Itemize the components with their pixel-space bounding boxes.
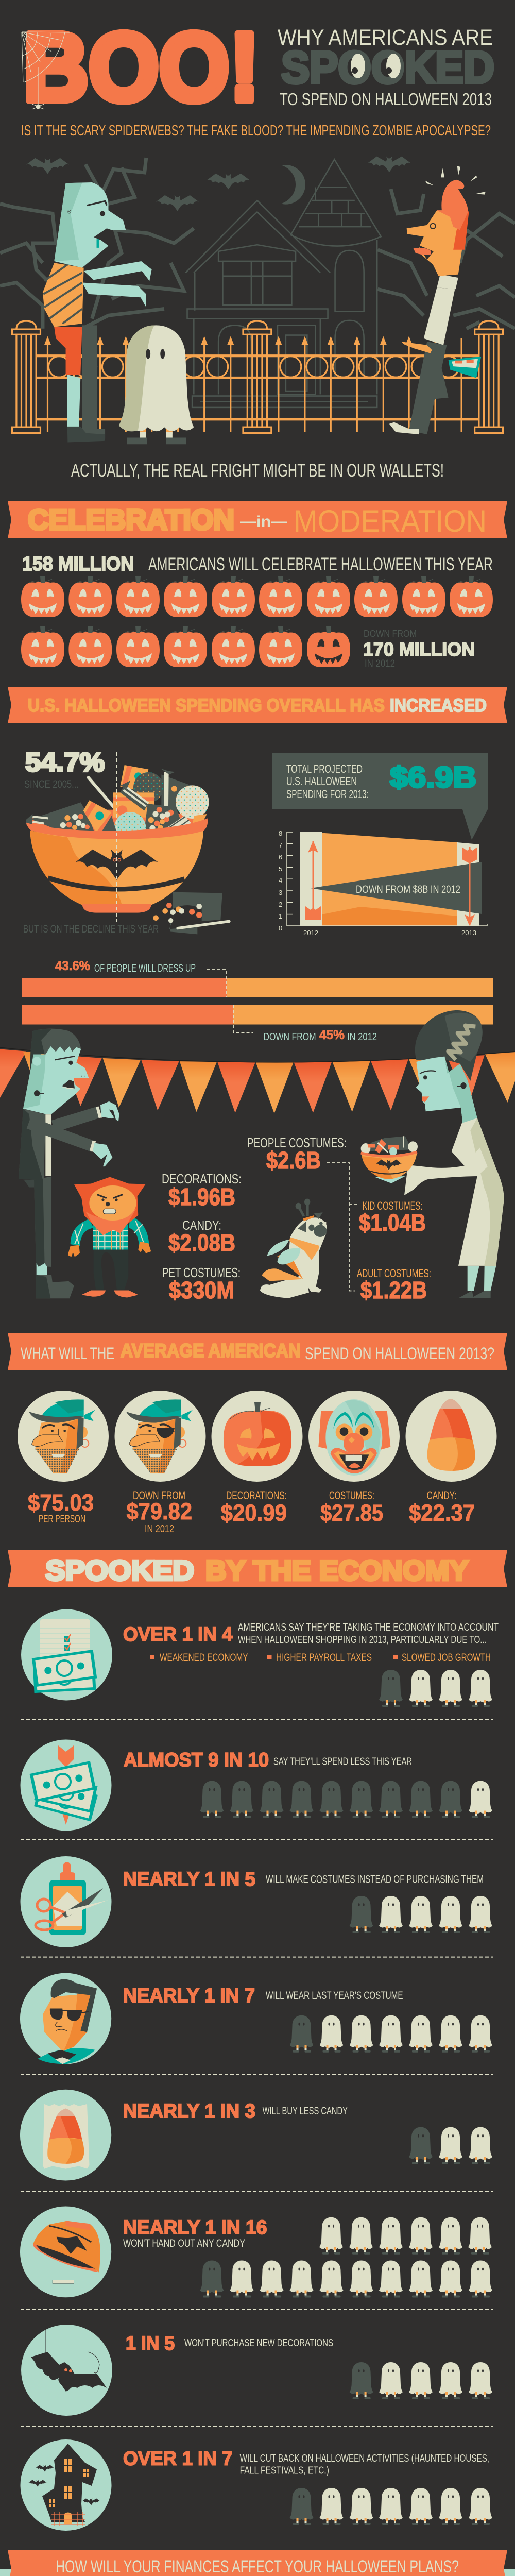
icon: candy corn bbox=[406, 1391, 496, 1482]
icon: greaser with sunglasses bbox=[20, 1973, 111, 2064]
candy bowl bbox=[26, 765, 209, 913]
ghost row bbox=[289, 2488, 492, 2525]
stat: 54.7 percent bbox=[24, 748, 105, 790]
heading: ALMOST 9 IN 10 bbox=[124, 1750, 269, 1771]
label: kid costumes: $1.04B bbox=[359, 1209, 426, 1236]
stat: down from 45 percent: IN 2012 bbox=[347, 1031, 377, 1043]
description: WILL BUY LESS CANDY bbox=[263, 2105, 348, 2117]
price: decorations: DECORATIONS: bbox=[226, 1489, 287, 1502]
haunted house outline bbox=[185, 159, 381, 408]
icon: pumpkin bbox=[211, 1391, 303, 1482]
footer mint background bbox=[0, 2569, 515, 2576]
price: decorations bbox=[221, 1489, 287, 1526]
icon: hanging bat bbox=[21, 2325, 112, 2416]
price: candy: $22.37 bbox=[409, 1500, 475, 1526]
chart labels: 1 bbox=[279, 912, 282, 920]
description: WON'T PURCHASE NEW DECORATIONS bbox=[184, 2337, 333, 2349]
fence bbox=[12, 321, 503, 433]
price: costumes bbox=[320, 1489, 383, 1526]
arrow: up 2012 bbox=[305, 841, 321, 920]
title: BOO!: BOO! bbox=[23, 13, 260, 121]
pumpkin row one bbox=[21, 576, 493, 617]
stat: down from 170 million: DOWN FROM bbox=[364, 629, 417, 639]
reasons list bbox=[150, 1652, 491, 1664]
banner: overall spending bbox=[8, 687, 507, 723]
divider bbox=[21, 2074, 493, 2075]
callout: total projected spending: U.S. HALLOWEEN bbox=[286, 775, 357, 788]
banner: average american: AVERAGE AMERICAN bbox=[121, 1340, 301, 1361]
item: nearly 1 in 7 bbox=[20, 1973, 492, 2064]
chart labels: 6 bbox=[279, 853, 282, 861]
price: 2012: IN 2012 bbox=[145, 1523, 174, 1535]
divider bbox=[21, 2191, 493, 2192]
chart labels: 0 bbox=[279, 924, 282, 932]
description bbox=[238, 1622, 499, 1646]
zombie: є bbox=[67, 207, 71, 215]
label: decorations bbox=[162, 1171, 242, 1210]
label: kid costumes bbox=[359, 1199, 426, 1236]
divider bbox=[21, 2309, 493, 2310]
moon bbox=[281, 165, 305, 205]
stat: down from 170 million: 170 MILLION bbox=[363, 639, 475, 660]
banner: celebration in moderation: MODERATION bbox=[294, 504, 487, 538]
banner: celebration in moderation: —in— bbox=[240, 513, 287, 530]
icon: clown mask bbox=[308, 1391, 400, 1482]
price: per person: $75.03 bbox=[28, 1489, 94, 1516]
chart labels: 2 bbox=[279, 901, 282, 908]
ghost child bbox=[119, 325, 194, 444]
icon: spooked eyes bbox=[351, 54, 401, 78]
label: kid costumes: KID COSTUMES: bbox=[363, 1199, 422, 1212]
icon: spiderweb and spider bbox=[22, 32, 70, 109]
bar: dress up 2012 bbox=[22, 1005, 493, 1024]
title block bbox=[21, 13, 494, 139]
icon: haunted house bbox=[21, 2439, 111, 2531]
item: 1 in 5 bbox=[21, 2325, 492, 2416]
chart labels: 5 bbox=[279, 865, 282, 873]
item: nearly 1 in 5 bbox=[21, 1856, 492, 1947]
label: people costumes bbox=[247, 1135, 347, 1174]
pumpkin row two bbox=[21, 626, 302, 667]
heading: NEARLY 1 IN 5 bbox=[123, 1869, 255, 1890]
price: decorations: $20.99 bbox=[221, 1500, 287, 1526]
bats bbox=[26, 157, 410, 211]
description bbox=[240, 2453, 489, 2477]
stat: down from 45 percent: 45% bbox=[319, 1028, 345, 1042]
price: 2012: $79.82 bbox=[127, 1498, 192, 1524]
heading: NEARLY 1 IN 16 bbox=[123, 2217, 267, 2239]
price: 2012 bbox=[127, 1489, 192, 1535]
stat: 158 million: 158 MILLION bbox=[22, 553, 134, 575]
stat: down from 45 percent bbox=[264, 1028, 377, 1043]
callout: total projected spending: TOTAL PROJECTED bbox=[286, 762, 363, 775]
ghost row upper bbox=[319, 2217, 492, 2255]
chart labels bbox=[279, 829, 476, 937]
chart labels: 3 bbox=[279, 889, 282, 896]
heading: 1 IN 5 bbox=[126, 2333, 175, 2354]
dark-faced pumpkin bbox=[307, 626, 350, 667]
item: nearly 1 in 3 bbox=[20, 2090, 492, 2181]
price: candy: CANDY: bbox=[426, 1489, 456, 1502]
label: pet costumes bbox=[162, 1265, 241, 1303]
label: candy bbox=[168, 1218, 235, 1256]
chart labels: 8 bbox=[279, 829, 282, 837]
stat: 43.6 percent dress up bbox=[55, 959, 196, 974]
heading: NEARLY 1 IN 7 bbox=[123, 1985, 255, 2007]
ghost row lower bbox=[200, 2261, 492, 2298]
icon: overturned candy bowl bbox=[20, 2206, 111, 2297]
label: candy: $2.08B bbox=[168, 1229, 235, 1256]
label: adult costumes: ADULT COSTUMES: bbox=[357, 1267, 431, 1280]
banner: average american bbox=[8, 1333, 507, 1370]
caption: decline: BUT IS ON THE DECLINE THIS YEAR bbox=[23, 923, 159, 935]
connector lines bbox=[207, 970, 253, 1032]
spilled candy wrapper bbox=[153, 892, 229, 934]
ghost row bbox=[379, 1670, 492, 1707]
bunting bbox=[0, 1047, 515, 1113]
item: almost 9 in 10 bbox=[21, 1739, 492, 1831]
chart labels: 7 bbox=[279, 841, 282, 849]
banner: spooked by the economy: BY THE ECONOMY bbox=[205, 1554, 469, 1586]
description: WON'T HAND OUT ANY CANDY bbox=[123, 2238, 245, 2249]
reasons list: HIGHER PAYROLL TAXES bbox=[276, 1652, 372, 1664]
label: decorations: $1.96B bbox=[168, 1183, 235, 1210]
connector: people costumes breakdown bbox=[327, 1163, 357, 1291]
icon: cash with down arrow bbox=[21, 1739, 111, 1831]
stat: 43.6 percent dress up: 43.6% bbox=[55, 959, 90, 973]
divider bbox=[21, 2426, 493, 2427]
ghost row bbox=[289, 2015, 492, 2053]
bride of frankenstein bbox=[404, 1010, 504, 1298]
chart: spending 2012 to 2013: DOWN FROM $8B IN 2012 bbox=[356, 884, 460, 895]
label: decorations: DECORATIONS: bbox=[162, 1171, 242, 1187]
icon: pirate with bandana bbox=[18, 1391, 109, 1482]
icon: notebook and cash bbox=[21, 1609, 112, 1700]
trees bbox=[0, 158, 515, 329]
item: nearly 1 in 16 bbox=[20, 2206, 492, 2298]
banner: spooked by the economy: SPOOKED bbox=[45, 1554, 194, 1586]
bar: dress up 2013 bbox=[22, 978, 493, 997]
callout: total projected spending bbox=[272, 753, 488, 840]
stat: 43.6 percent dress up: OF PEOPLE WILL DRESS UP bbox=[94, 962, 196, 974]
heading: NEARLY 1 IN 3 bbox=[123, 2100, 255, 2122]
label: candy: CANDY: bbox=[182, 1218, 221, 1233]
zombie bbox=[43, 182, 152, 442]
banner: overall spending: U.S. HALLOWEEN SPENDING OVERALL HAS bbox=[28, 696, 385, 716]
ghost row bbox=[350, 2362, 492, 2399]
ghost row bbox=[409, 2127, 492, 2164]
ghost row bbox=[350, 1896, 492, 1933]
divider: vertical dashed bbox=[116, 752, 117, 922]
price: 2012: DOWN FROM bbox=[133, 1489, 185, 1502]
price: costumes: $27.85 bbox=[320, 1500, 383, 1526]
chart axes bbox=[287, 832, 487, 926]
stat: down from 170 million: IN 2012 bbox=[365, 658, 395, 669]
subtitle: why americans are: WHY AMERICANS ARE bbox=[278, 25, 493, 50]
divider bbox=[21, 1839, 493, 1840]
price: candy bbox=[409, 1489, 475, 1526]
chart: spending 2012 to 2013 bbox=[279, 829, 487, 937]
callout: total projected spending: SPENDING FOR 2013: bbox=[286, 788, 369, 801]
banner: celebration in moderation bbox=[8, 501, 507, 538]
heading: OVER 1 IN 7 bbox=[123, 2448, 233, 2469]
stat: 158 million bbox=[22, 553, 493, 575]
hero scene bbox=[0, 157, 515, 444]
werewolf kid bbox=[68, 1177, 151, 1297]
banner: spooked by the economy bbox=[8, 1550, 507, 1587]
banner: average american: WHAT WILL THE bbox=[21, 1344, 114, 1363]
reasons list: WEAKENED ECONOMY bbox=[160, 1652, 248, 1664]
label: people costumes: $2.6B bbox=[266, 1147, 321, 1174]
stat: 54.7 percent: 54.7% bbox=[25, 748, 105, 777]
label: adult costumes bbox=[357, 1267, 431, 1303]
icon: wrapped candy corn bbox=[20, 2090, 111, 2181]
scared man bbox=[389, 166, 486, 434]
icon: pirate with eye patch bbox=[114, 1391, 206, 1482]
banner: overall spending: INCREASED bbox=[390, 696, 487, 716]
item: over 1 in 4 bbox=[21, 1609, 499, 1707]
description: FALL FESTIVALS, ETC.) bbox=[240, 2465, 329, 2477]
callout: total projected spending: $6.9B bbox=[390, 761, 476, 794]
stat: down from 45 percent: DOWN FROM bbox=[264, 1031, 316, 1043]
stat: 54.7 percent: SINCE 2005... bbox=[24, 778, 79, 790]
chart labels: 2013 bbox=[461, 929, 476, 937]
frankenstein bbox=[19, 1029, 119, 1298]
item: over 1 in 7 bbox=[21, 2439, 492, 2531]
banner: celebration in moderation: CELEBRATION bbox=[28, 503, 234, 536]
heading: OVER 1 IN 4 bbox=[123, 1624, 233, 1646]
label: people costumes: PEOPLE COSTUMES: bbox=[247, 1135, 347, 1150]
bride's candy bowl bbox=[361, 1136, 418, 1183]
stat: down from 170 million bbox=[363, 629, 475, 669]
subtitle: spooked: SPOOKED bbox=[281, 42, 494, 93]
description: WILL WEAR LAST YEAR'S COSTUME bbox=[266, 1990, 403, 2002]
chart labels: 4 bbox=[279, 876, 282, 884]
ghost row bbox=[200, 1781, 492, 1818]
bowl body bbox=[30, 831, 203, 905]
icon: glue and scissors bbox=[21, 1856, 111, 1947]
price: per person: PER PERSON bbox=[39, 1513, 85, 1525]
divider bbox=[21, 1719, 493, 1720]
divider bbox=[21, 1957, 493, 1958]
label: pet costumes: PET COSTUMES: bbox=[162, 1265, 241, 1280]
price: costumes: COSTUMES: bbox=[329, 1489, 374, 1502]
label: pet costumes: $330M bbox=[169, 1277, 234, 1303]
banner: how will your finances bbox=[8, 2550, 507, 2576]
pug in bee costume bbox=[260, 1199, 327, 1298]
label: adult costumes: $1.22B bbox=[360, 1277, 427, 1303]
arrow: down 2013 bbox=[462, 847, 477, 926]
description: SAY THEY'LL SPEND LESS THIS YEAR bbox=[273, 1756, 412, 1767]
chart labels: 2012 bbox=[303, 929, 318, 937]
